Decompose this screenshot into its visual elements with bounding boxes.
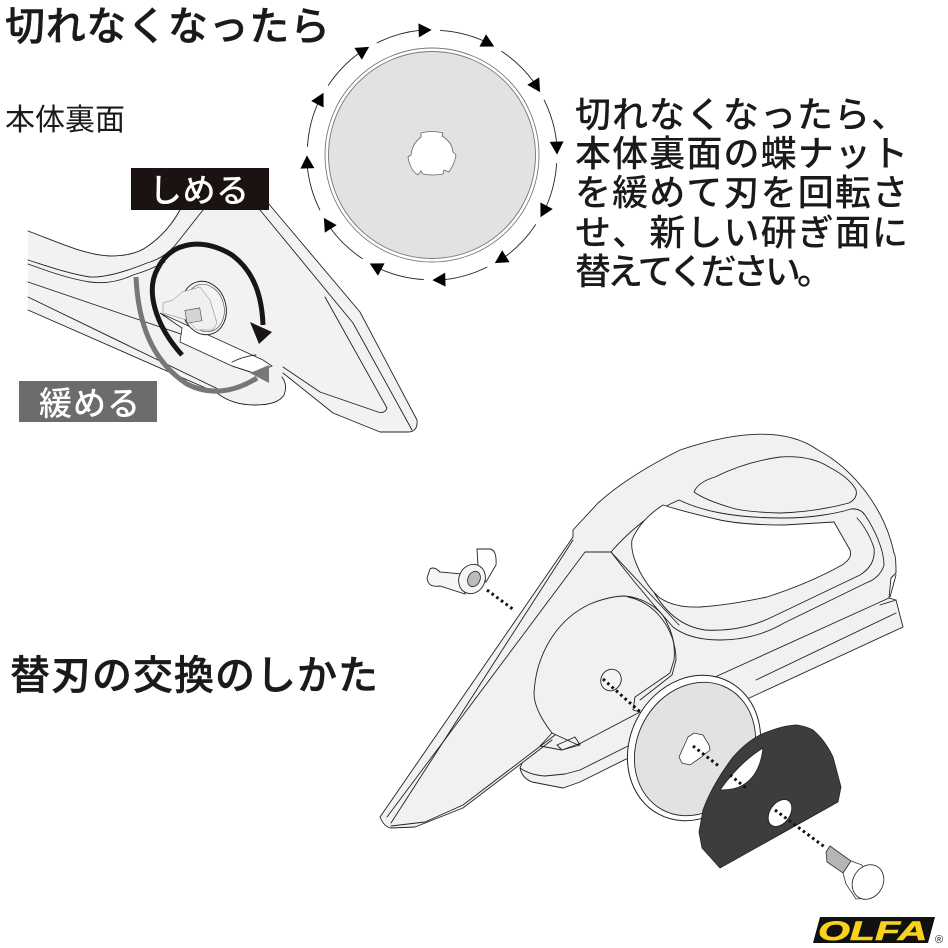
blade (602, 652, 786, 844)
title: when it stops cutting: 切れなくなったら (5, 5, 330, 49)
text block: instructions: を緩めて刃を回転さ (575, 172, 908, 213)
text block: instructions: 切れなくなったら、 (575, 94, 907, 135)
dotted guide: body to blade (603, 679, 647, 718)
logo: OLFA: ® (935, 934, 943, 946)
text block: instructions: 替えてください。 (575, 251, 833, 292)
dotted guide: wing nut (487, 590, 514, 610)
illustration: back of the cutter with wing nut (28, 203, 417, 432)
logo: OLFA: OLFA (818, 917, 927, 946)
arrow: tighten (black) (152, 244, 272, 355)
label: loosen (19, 381, 157, 422)
label: back of the body: 本体裏面 (5, 104, 125, 137)
illustration: exploded view of the cutter (380, 434, 903, 905)
text block: instructions: せ、新しい研ぎ面に (575, 212, 908, 253)
arrow: loosen (grey) (136, 277, 269, 391)
icon: rotary blade with rotation arrows (292, 15, 572, 295)
icon: wing nut and washer (163, 276, 232, 340)
heading: how to replace the blade: 替刃の交換のしかた (10, 654, 378, 698)
blade cover disc (534, 596, 674, 745)
label: loosen: 緩める (39, 385, 140, 422)
label: tighten (131, 168, 269, 210)
label: tighten: しめる (149, 172, 249, 209)
text block: instructions (575, 94, 908, 292)
icon: wing nut (427, 549, 496, 598)
text block: instructions: 本体裏面の蝶ナット (575, 133, 908, 174)
cutter body (380, 434, 903, 828)
icon: screw (826, 846, 890, 905)
blade cover plate (699, 725, 841, 868)
dotted guide: through plate (730, 775, 826, 848)
dotted guide: through blade (693, 746, 720, 767)
